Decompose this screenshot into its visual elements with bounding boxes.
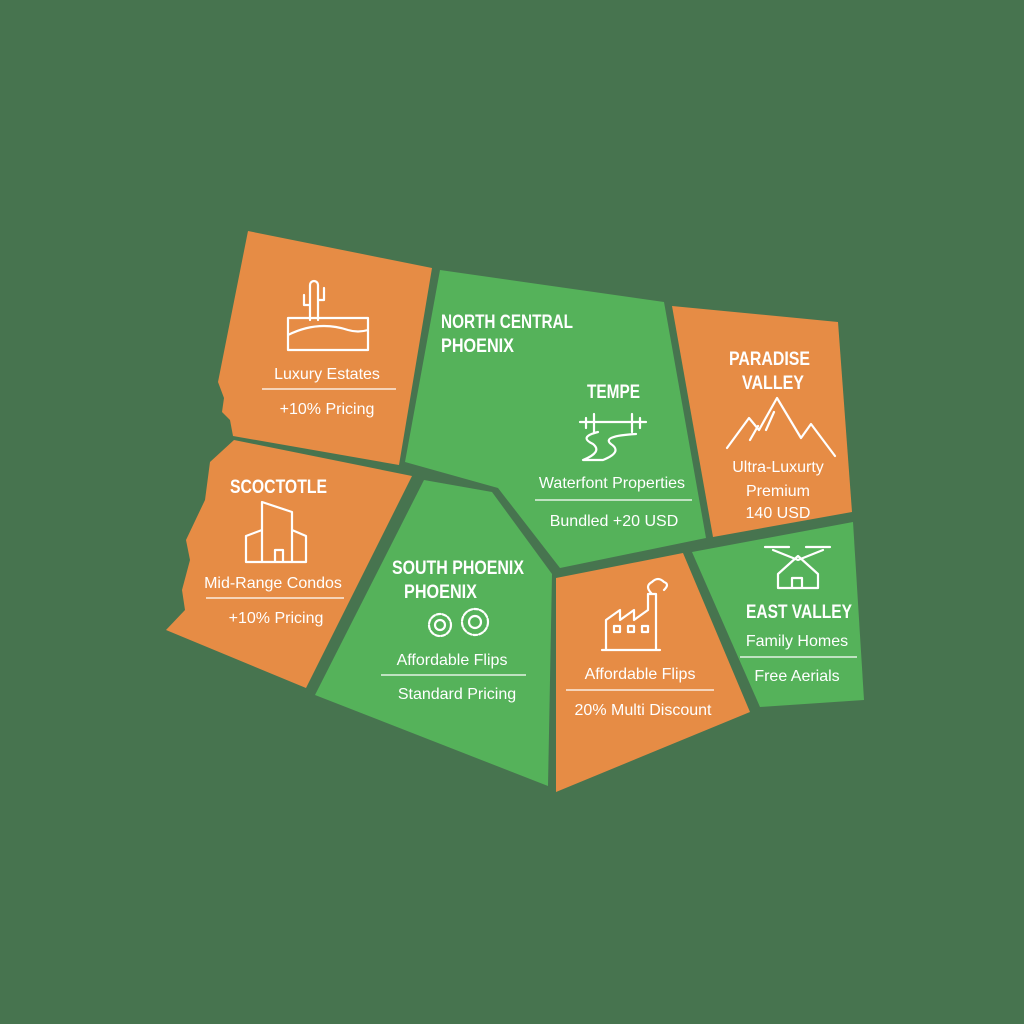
icon: building xyxy=(246,502,306,562)
icon: factory xyxy=(602,579,667,650)
region: south phoenix xyxy=(315,480,552,786)
icon: mountains xyxy=(727,398,835,456)
text: family homes: Family Homes xyxy=(746,633,848,650)
text: affordable flips: Affordable Flips xyxy=(397,652,507,669)
text: bundled: Bundled +20 USD xyxy=(550,513,678,530)
region: paradise valley: 140 USD xyxy=(746,505,810,522)
region: north central phoenix / tempe: PHOENIX xyxy=(441,336,514,357)
text: waterfront: Waterfont Properties xyxy=(539,475,685,492)
icon: bridge river xyxy=(580,414,646,460)
icon: gears xyxy=(429,609,488,636)
text: discount: 20% Multi Discount xyxy=(575,702,712,719)
region: south phoenix: PHOENIX xyxy=(404,582,477,603)
heading: paradise valley: PARADISE xyxy=(729,349,810,370)
heading: north central phoenix: NORTH CENTRAL xyxy=(441,312,573,333)
region: north central phoenix / tempe xyxy=(405,270,706,568)
text: ultra-luxury: Ultra-Luxurty xyxy=(732,459,824,476)
text: luxury estates: Luxury Estates xyxy=(274,366,380,383)
icon: drone house xyxy=(765,547,830,588)
text: standard pricing: Standard Pricing xyxy=(398,686,516,703)
region: paradise valley: VALLEY xyxy=(742,373,804,394)
region: paradise valley xyxy=(672,306,852,537)
text: pricing: +10% Pricing xyxy=(280,401,374,418)
region: luxury estates xyxy=(218,231,432,465)
text: free aerials: Free Aerials xyxy=(754,668,840,685)
heading: tempe: TEMPE xyxy=(587,382,640,403)
region: east valley xyxy=(692,522,864,707)
heading: scoctotle: SCOCTOTLE xyxy=(230,477,327,498)
text: condos: Mid-Range Condos xyxy=(204,575,342,592)
text: affordable flips: Affordable Flips xyxy=(585,666,695,683)
region: paradise valley: Premium xyxy=(746,483,810,500)
region: affordable flips east xyxy=(556,553,750,792)
heading: south phoenix: SOUTH PHOENIX xyxy=(392,558,524,579)
icon: cactus desert xyxy=(288,281,368,350)
text: pricing: +10% Pricing xyxy=(229,610,323,627)
heading: east valley: EAST VALLEY xyxy=(746,602,852,623)
region: scoctotle xyxy=(166,440,412,688)
